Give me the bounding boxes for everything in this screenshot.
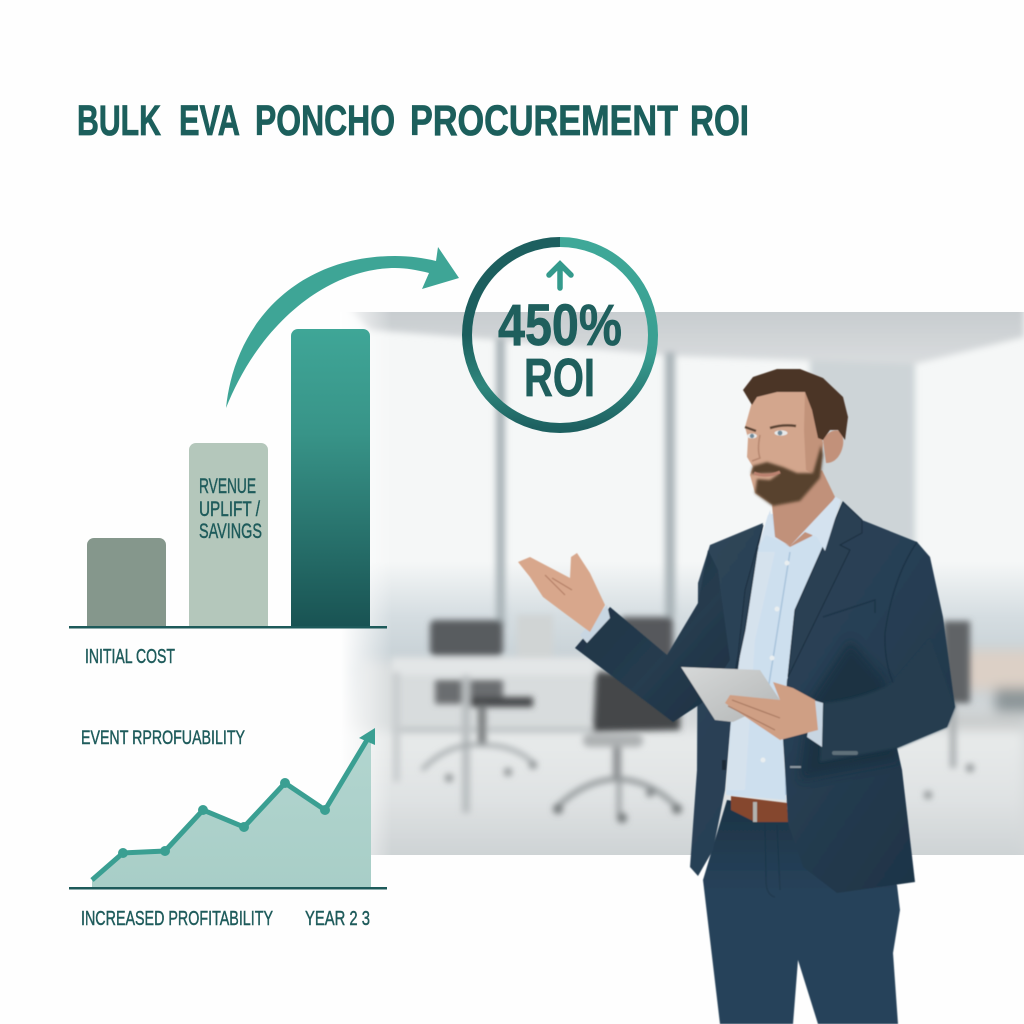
shirt [726,497,836,800]
beard [751,445,823,506]
line chart: event profitability [69,727,387,930]
mouth [754,472,780,475]
raised hand [518,553,605,632]
bar label: revenue uplift / savings [199,475,262,543]
jacket shadow under sleeve [800,640,900,780]
chart axis [69,887,387,890]
title: PONCHO [255,97,395,145]
icon: up arrow [549,264,571,288]
trend line [92,740,367,880]
jacket body [690,502,955,893]
ring: left half [467,242,560,428]
bar: total return [291,329,370,626]
shirt placket and buttons [727,552,790,795]
belt [731,796,788,822]
head [743,369,848,506]
title: ROI [690,97,749,145]
arrow head [359,728,375,745]
left cuff [580,605,610,643]
person: presenter with tablet [518,369,955,1024]
eyes and brows [745,425,796,438]
neck [772,470,835,547]
stat label: ROI: ROI [524,348,595,408]
extended arm [575,550,730,722]
fly seam [765,823,780,897]
finger creases [728,700,780,730]
holding hand [725,682,818,740]
hand creases [545,575,572,595]
bar label: revenue uplift / savings: SAVINGS [199,520,262,543]
ring: right half [560,242,653,428]
chart heading: EVENT RPROFUABILITY [81,727,245,749]
bar label: revenue uplift / savings: RVENUE [199,475,256,498]
tablet [681,667,780,722]
background photo: blurred office [340,300,1024,870]
right forearm sleeve [820,640,955,762]
stat: 450%: 450% [498,293,622,358]
sleeve buttons [832,751,858,755]
collar [758,497,841,551]
title: PROCUREMENT [410,97,678,145]
area fill [92,736,371,888]
jacket sleeve and pocket creases [822,542,917,762]
hair [743,369,848,440]
title: EVA [179,97,240,145]
axis label: increased profitability: INCREASED PROFITABILITY [81,907,273,930]
axis label: initial cost: INITIAL COST [85,646,175,668]
axis label: year: YEAR 2 3 [305,907,370,930]
title [77,97,749,145]
bar label: revenue uplift / savings: UPLIFT / [199,498,260,521]
ear [823,430,843,463]
bar: initial cost [87,538,166,626]
lapels [730,502,862,700]
jacket buttons [722,760,801,770]
bar chart: ROI comparison [69,329,387,668]
data points [118,778,330,858]
bar: revenue uplift / savings [189,443,268,626]
face side shadow [804,392,823,477]
nose shadow [752,435,760,461]
right cuff [807,700,823,747]
title: BULK [77,97,161,145]
ROI badge [467,242,653,428]
face [745,390,823,505]
bar chart axis [69,626,387,628]
trousers [703,800,900,1024]
arrow: curved growth arrow [226,247,459,408]
